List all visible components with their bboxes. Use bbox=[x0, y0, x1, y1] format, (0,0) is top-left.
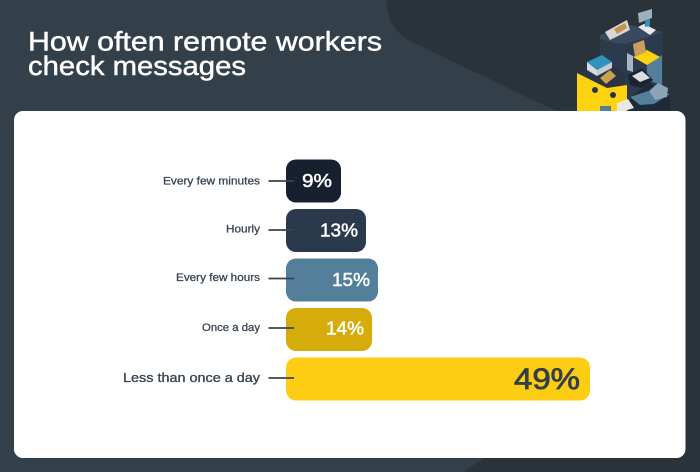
row: Less than once a day: Less than once a day bbox=[123, 370, 261, 385]
panel: chart card bbox=[14, 111, 686, 458]
row: Every few hours bbox=[176, 258, 378, 302]
bar chart bbox=[123, 160, 590, 400]
row: Every few minutes: Every few minutes bbox=[163, 176, 261, 188]
row: Once a day: Once a day bbox=[202, 322, 261, 334]
title: check messages bbox=[28, 51, 246, 81]
row: Hourly: Hourly bbox=[226, 224, 261, 236]
row: Every few minutes bbox=[163, 160, 341, 202]
row: Once a day bbox=[202, 308, 372, 351]
row: Once a day: 14% bbox=[326, 318, 364, 338]
row: Less than once a day bbox=[123, 358, 590, 400]
row: Every few hours: 15% bbox=[332, 269, 370, 290]
icon: isometric warehouse illustration bbox=[577, 9, 670, 111]
row: Every few hours: Every few hours bbox=[176, 272, 261, 284]
title: How often remote workers bbox=[28, 26, 382, 56]
row: Less than once a day: 49% bbox=[514, 363, 580, 396]
row: Hourly bbox=[226, 209, 366, 252]
title bbox=[28, 26, 382, 81]
row: Hourly: 13% bbox=[320, 220, 358, 240]
row: Every few minutes: 9% bbox=[302, 170, 332, 191]
